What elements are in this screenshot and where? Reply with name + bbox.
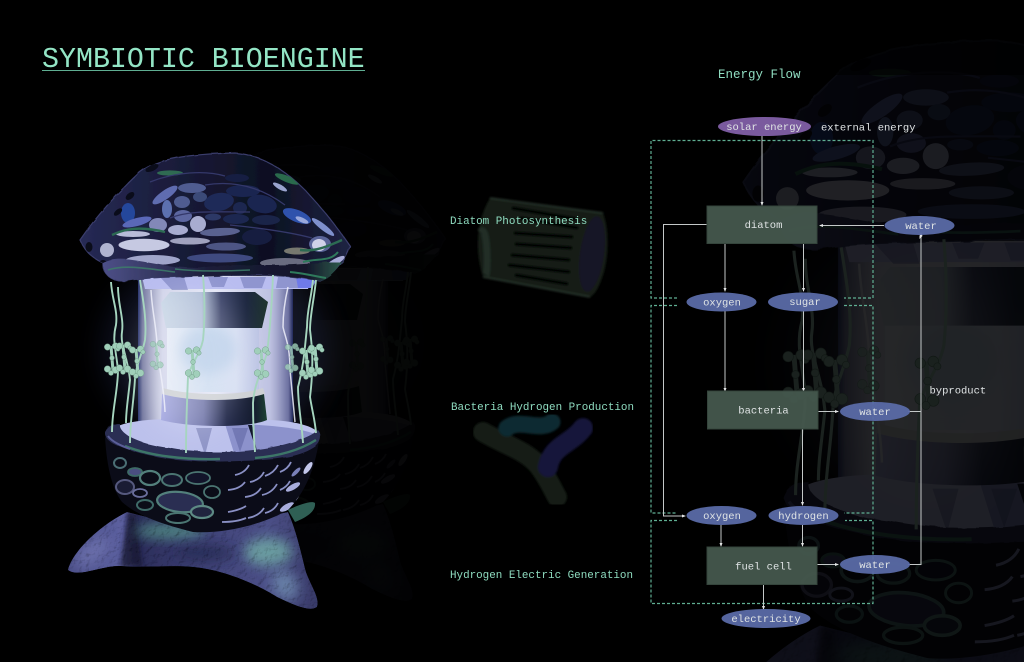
node: hydrogen [768, 506, 838, 525]
node: solar energy [718, 117, 811, 136]
node: sugar: sugar [789, 297, 821, 309]
node: oxygen from diatom [686, 292, 756, 312]
node: solar energy: solar energy [726, 122, 802, 134]
node: bacteria [708, 391, 818, 429]
node: water from fuel cell [840, 555, 910, 574]
cap rim [103, 259, 342, 281]
arrowheads [682, 202, 922, 610]
glass cylinder [103, 255, 327, 445]
flow connectors [664, 136, 921, 609]
node: electricity [722, 609, 810, 628]
note: external energy: external energy [821, 122, 916, 134]
node: bacteria: bacteria [738, 406, 789, 418]
label: hydrogen electric generation: Hydrogen Electric Generation [450, 570, 633, 582]
lattice basket [105, 424, 320, 532]
node: hydrogen: hydrogen [778, 511, 829, 523]
node: water from fuel cell: water [859, 560, 891, 572]
node: fuel cell: fuel cell [735, 562, 792, 574]
node: diatom [707, 206, 817, 244]
illustration: bacteria [483, 422, 583, 497]
node: sugar [768, 292, 838, 312]
title: SYMBIOTIC BIOENGINE [42, 44, 365, 76]
base with three feet [68, 502, 318, 609]
node: water input [884, 216, 954, 235]
node: water from bacteria: water [859, 407, 891, 419]
label: bacteria hydrogen production: Bacteria Hydrogen Production [451, 402, 634, 414]
illustration: bioengine [68, 153, 350, 609]
node: oxygen to fuel cell: oxygen [703, 511, 741, 523]
dashed stage outlines [651, 140, 873, 604]
reactor core [161, 292, 268, 455]
basket rim [105, 424, 320, 462]
node: water from bacteria [840, 402, 910, 421]
soft bloom around core [138, 290, 242, 430]
energy flow diagram [651, 68, 986, 628]
label: diatom photosynthesis: Diatom Photosynthesis [450, 216, 587, 228]
node: oxygen to fuel cell [686, 506, 756, 525]
node: electricity: electricity [731, 614, 801, 626]
diagram heading: Energy Flow [718, 68, 801, 82]
node: oxygen from diatom: oxygen [703, 298, 741, 310]
node: diatom: diatom [745, 220, 782, 232]
tendrils and connectors [104, 275, 324, 453]
cap [80, 153, 350, 281]
lower bowl interior [112, 419, 318, 456]
note: byproduct: byproduct [930, 386, 986, 398]
node: water input: water [905, 221, 937, 233]
node: fuel cell [707, 547, 817, 584]
illustration: diatom [478, 198, 609, 297]
